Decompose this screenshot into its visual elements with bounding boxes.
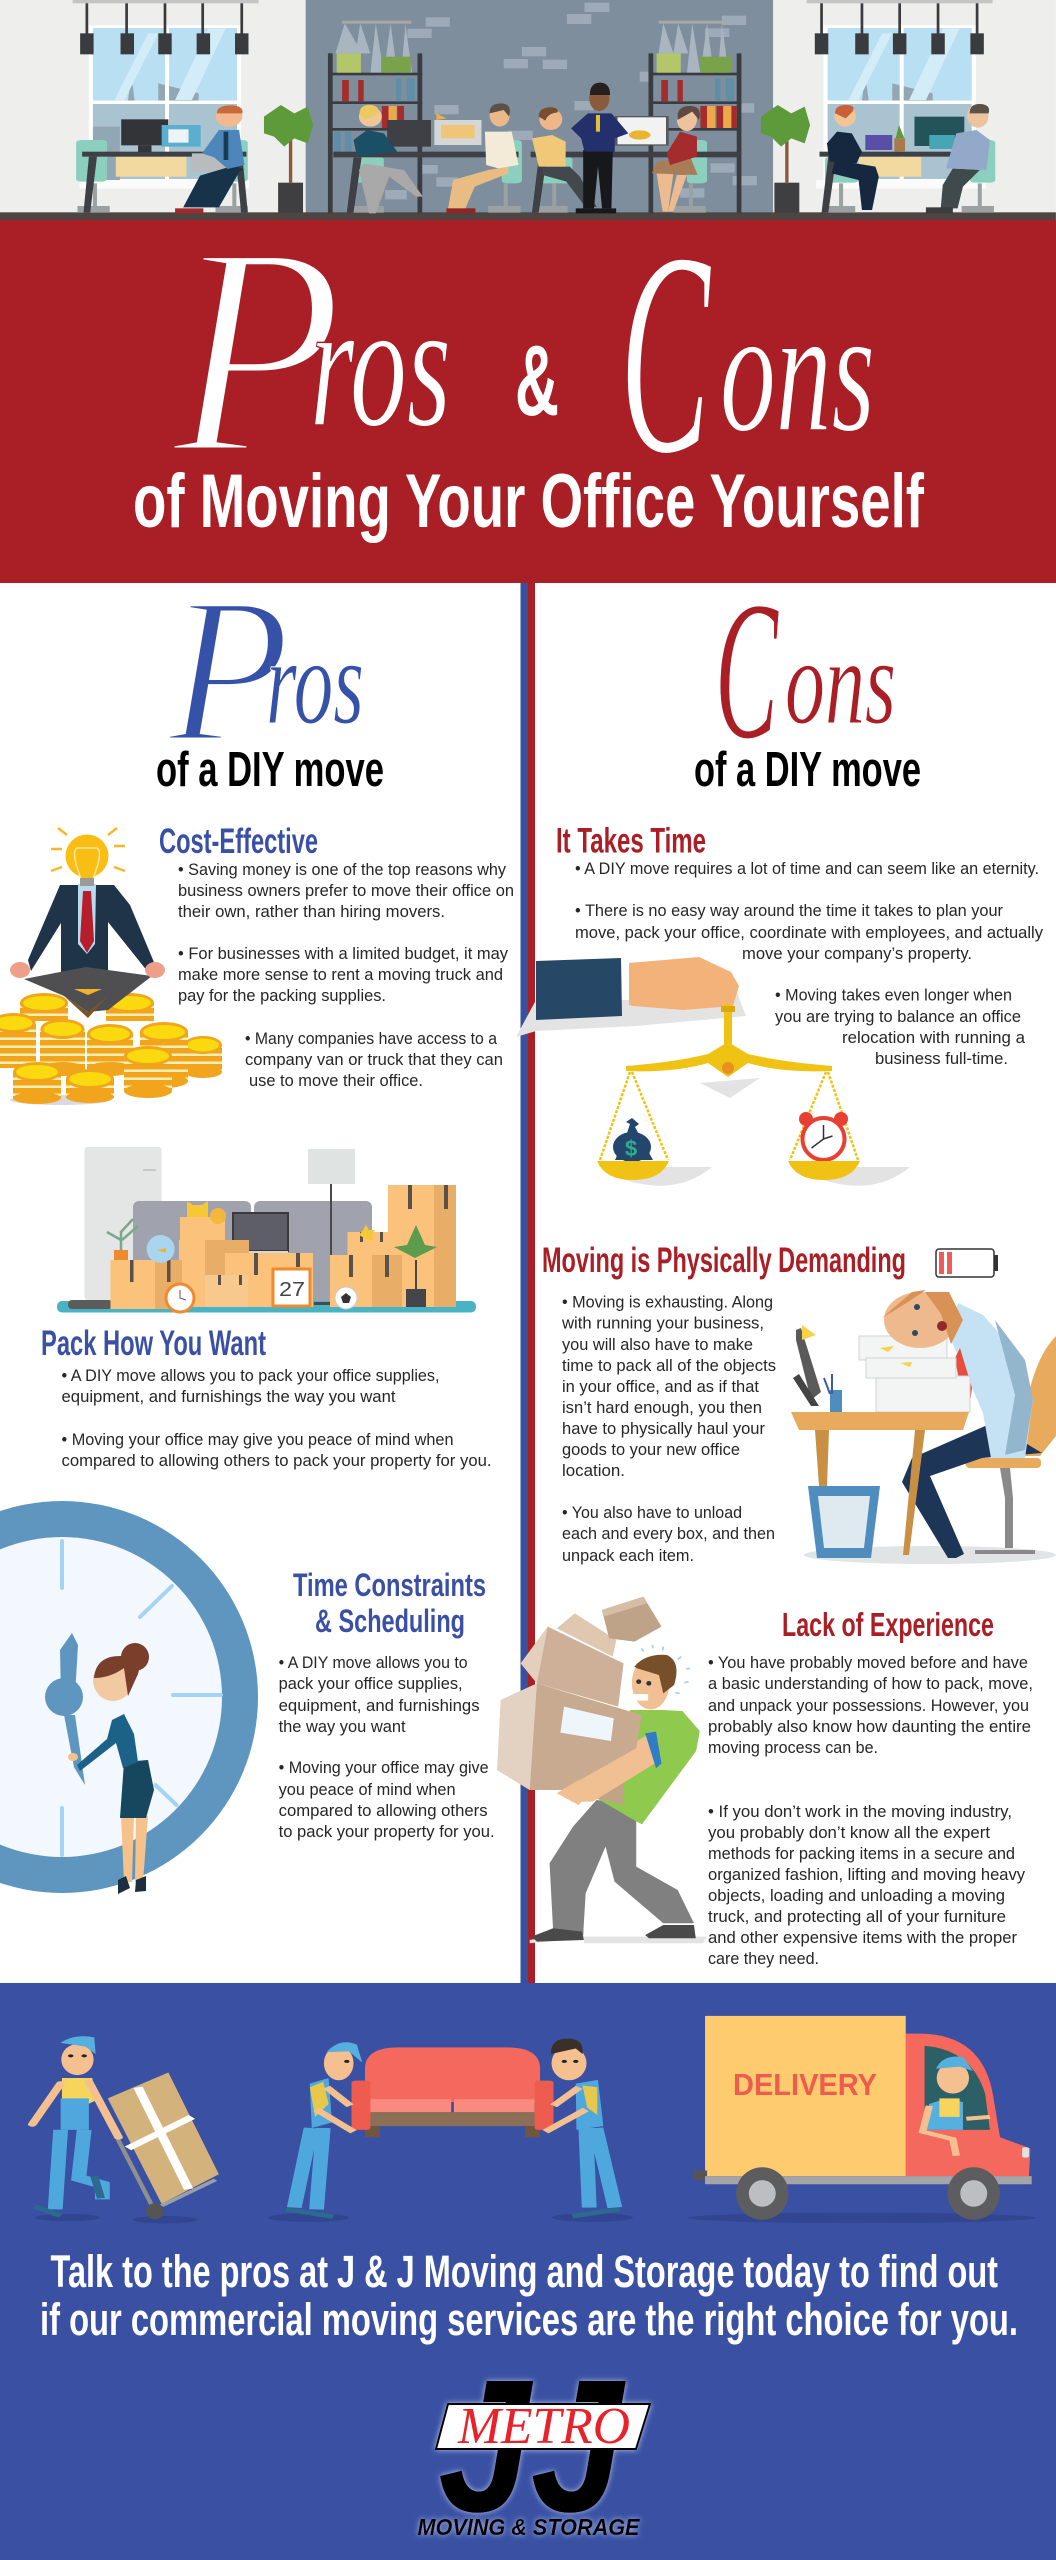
text: It Takes Time: relocation with running a	[842, 1029, 1026, 1047]
text: Time Constraints & Scheduling: you peace of mind when	[279, 1781, 456, 1799]
icon: low battery	[936, 1249, 998, 1277]
shelves	[328, 21, 741, 213]
text: Time Constraints & Scheduling: compared to allowing others	[279, 1802, 488, 1820]
heading: Cons of a DIY move: ons	[785, 615, 896, 750]
text: Cost-Effective: use to move their office.	[249, 1072, 423, 1090]
text: Moving is Physically Demanding	[542, 1241, 998, 1565]
text: Cost-Effective: pay for the packing supplies.	[178, 987, 386, 1005]
text: Time Constraints & Scheduling: pack your office supplies,	[279, 1675, 463, 1693]
text: Moving is Physically Demanding: • Moving is exhausting. Along	[562, 1294, 773, 1312]
text: Lack of Experience: moving process can be.	[708, 1739, 878, 1757]
text: It Takes Time: move, pack your office, coordinate with employees, and actually	[575, 924, 1044, 942]
text: Lack of Experience: you probably don’t know all the expert	[708, 1824, 990, 1842]
man in suit	[10, 828, 165, 1018]
text: Cost-Effective: make more sense to rent a moving truck and	[178, 966, 503, 984]
delivery truck	[694, 2016, 1032, 2220]
heading: Cons of a DIY move	[694, 561, 921, 797]
text: Lack of Experience: • If you don’t work in the moving industry,	[708, 1803, 1012, 1821]
text: Lack of Experience: and other expensive items with the proper	[708, 1929, 1018, 1947]
illustration: movers and delivery truck	[32, 2016, 1036, 2223]
right window	[816, 25, 986, 189]
panel: title banner	[0, 184, 1056, 583]
text: Moving is Physically Demanding: have to physically haul your	[562, 1420, 766, 1438]
text: Time Constraints & Scheduling: & Scheduling	[315, 1603, 465, 1639]
text: Cost-Effective: Cost-Effective	[159, 822, 318, 861]
text: Moving is Physically Demanding: location.	[562, 1462, 625, 1480]
sofa	[352, 2047, 554, 2137]
illustration: businessman with bulb head on coins	[0, 828, 222, 1105]
illustration: packed boxes in a room: 27	[279, 1279, 305, 1301]
text: It Takes Time: It Takes Time	[556, 822, 706, 860]
icon: coin stacks	[0, 993, 222, 1105]
center divider	[520, 583, 535, 1983]
text: Cost-Effective	[159, 822, 514, 1090]
heading: Pros of a DIY move: of a DIY move	[156, 743, 384, 797]
plants	[264, 105, 810, 213]
truck label: DELIVERY	[733, 2067, 877, 2102]
text: Pack How You Want: Pack How You Want	[41, 1324, 266, 1363]
text: Time Constraints & Scheduling: equipment, and furnishings	[279, 1697, 480, 1715]
title: Pros & Cons: ros	[310, 265, 451, 464]
office workers and computers	[121, 83, 990, 213]
text: Pack How You Want	[41, 1324, 492, 1470]
heading: Pros of a DIY move: ros	[266, 615, 364, 750]
call to action text	[40, 2246, 1018, 2345]
text: Lack of Experience: and unpack your possessions. However, you	[708, 1697, 1029, 1715]
title: Pros & Cons: C	[620, 193, 713, 514]
text: Time Constraints & Scheduling: Time Constraints	[293, 1567, 486, 1603]
text: Moving is Physically Demanding: time to pack all of the objects	[562, 1357, 776, 1375]
illustration: office banner	[0, 0, 1056, 220]
text: Time Constraints & Scheduling: to pack your property for you.	[279, 1823, 495, 1841]
text: Lack of Experience: organized fashion, lifting and moving heavy	[708, 1866, 1026, 1884]
text: Moving is Physically Demanding: in your office, and as if that	[562, 1378, 759, 1396]
text: Lack of Experience: methods for packing items in a secure and	[708, 1845, 1015, 1863]
logo: J J Metro Moving & Storage: JJ	[438, 2341, 626, 2552]
text: Moving is Physically Demanding: unpack each item.	[562, 1547, 694, 1565]
text: Cost-Effective: • Saving money is one of the top reasons why	[178, 861, 507, 879]
text: Moving is Physically Demanding: with running your business,	[561, 1315, 764, 1333]
title: Pros & Cons: P	[168, 184, 343, 516]
title: Pros & Cons	[168, 184, 875, 516]
text: It Takes Time: move your company’s property.	[742, 945, 972, 963]
woman	[68, 1643, 154, 1894]
left sofa mover	[286, 2042, 362, 2217]
text: Lack of Experience: • You have probably moved before and have	[708, 1654, 1028, 1672]
heading: Cons of a DIY move: C	[715, 561, 779, 780]
text: Moving is Physically Demanding: each and every box, and then	[562, 1525, 775, 1543]
heading: Pros of a DIY move	[156, 555, 384, 797]
text: It Takes Time: business full-time.	[875, 1050, 1008, 1068]
text: Time Constraints & Scheduling: • Moving your office may give	[279, 1759, 489, 1777]
text: Moving is Physically Demanding: isn’t hard enough, you then	[562, 1399, 762, 1417]
text: Time Constraints & Scheduling: the way you want	[279, 1718, 406, 1736]
text: Moving is Physically Demanding: • You also have to unload	[562, 1504, 742, 1522]
text: Lack of Experience: care they need.	[708, 1950, 819, 1968]
text: Cost-Effective: • For businesses with a limited budget, it may	[178, 945, 509, 963]
text: It Takes Time: • Moving takes even longer when	[775, 986, 1012, 1004]
right sofa mover	[545, 2038, 620, 2216]
text: Lack of Experience: objects, loading and unloading a moving	[708, 1887, 1005, 1905]
mover with hand truck	[32, 2036, 219, 2219]
text: Cost-Effective: their own, rather than hiring movers.	[178, 903, 445, 921]
heading: Pros of a DIY move: P	[166, 555, 290, 785]
illustration: packed boxes in a room	[57, 1147, 476, 1312]
text: Moving is Physically Demanding: you will also have to make	[562, 1336, 753, 1354]
illustration: man carrying boxes	[497, 1597, 707, 1943]
text: Time Constraints & Scheduling: • A DIY move allows you to	[279, 1654, 468, 1672]
text: Time Constraints & Scheduling	[279, 1567, 495, 1841]
text: It Takes Time: you are trying to balance an office	[775, 1008, 1021, 1026]
text: Cost-Effective: business owners prefer to move their office on	[178, 882, 514, 900]
desks and chairs	[76, 140, 995, 213]
text: Moving is Physically Demanding: goods to your new office	[562, 1441, 740, 1459]
illustration: hand holding balance scales: $	[625, 1136, 637, 1161]
left window	[79, 25, 249, 189]
logo: J J Metro Moving & Storage: METRO	[457, 2398, 630, 2455]
text: It Takes Time	[556, 822, 1044, 1068]
panel: call to action footer	[0, 1983, 1056, 2560]
ceiling lamps	[73, 0, 993, 54]
text: Lack of Experience: a basic understanding of how to pack, move,	[708, 1675, 1033, 1693]
text: Lack of Experience	[708, 1606, 1033, 1968]
text: Pack How You Want: • A DIY move allows you to pack your office supplies,	[62, 1367, 440, 1385]
text: Cost-Effective: • Many companies have access to a	[245, 1030, 498, 1048]
illustration: exhausted man at desk	[791, 1290, 1056, 1564]
illustration: woman pushing clock hand	[0, 1501, 258, 1894]
text: Pack How You Want: compared to allowing others to pack your property for you.	[62, 1452, 492, 1470]
title: Pros & Cons: ons	[720, 271, 875, 469]
text: Pack How You Want: • Moving your office may give you peace of mind when	[62, 1431, 454, 1449]
text: Cost-Effective: company van or truck that they can	[245, 1051, 503, 1069]
logo: J J Metro Moving & Storage: MOVING & STORAGE	[418, 2514, 640, 2540]
text: It Takes Time: • A DIY move requires a lot of time and can seem like an eternity.	[575, 860, 1039, 878]
title: Pros & Cons: &	[515, 325, 559, 437]
text: Lack of Experience: probably also know how daunting the entire	[708, 1718, 1031, 1736]
illustration: hand holding balance scales	[516, 957, 910, 1186]
text: Pack How You Want: equipment, and furnishings the way you want	[62, 1388, 396, 1406]
text: Lack of Experience: truck, and protecting all of your furniture	[708, 1908, 1006, 1926]
heading: Cons of a DIY move: of a DIY move	[694, 743, 921, 797]
text: It Takes Time: • There is no easy way around the time it takes to plan your	[575, 902, 1003, 920]
